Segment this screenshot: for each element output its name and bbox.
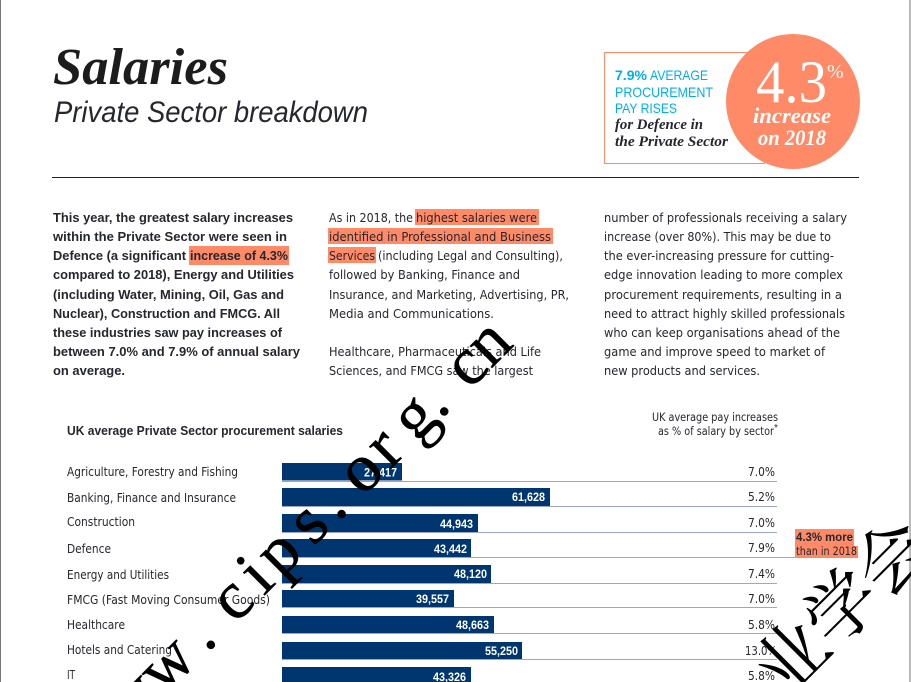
callout text: PAY RISES <box>615 100 677 116</box>
text column 3: number of professionals receiving a salary <box>604 210 847 225</box>
callout text: 7.9% <box>615 67 648 83</box>
row: Defence: Defence <box>67 542 111 556</box>
text column 2: highest salaries were <box>416 210 537 225</box>
text column 2: Healthcare, Pharmaceuticals and Life <box>329 344 541 359</box>
text column 1: Nuclear), Construction and FMCG. All <box>53 306 280 321</box>
row: Banking: Banking, Finance and Insurance <box>67 491 236 505</box>
text column 2: Services <box>329 248 375 263</box>
row: Defence <box>67 539 795 558</box>
row: Agriculture: 27,417 <box>364 466 397 480</box>
text column 3: increase (over 80%). This may be due to <box>604 229 831 244</box>
circle: 4.3% increase: on 2018 <box>758 125 826 150</box>
text column 3 <box>604 210 847 378</box>
text column 3: new products and services. <box>604 363 760 378</box>
row: Banking: 61,628 <box>512 490 545 504</box>
row: Energy: Energy and Utilities <box>67 568 169 582</box>
circle: 4.3% increase <box>726 34 860 169</box>
row: Hotels: 55,250 <box>485 644 518 658</box>
text column 2: As in 2018, the <box>329 210 413 225</box>
text column 3: the ever-increasing pressure for cutting- <box>604 248 834 263</box>
row: IT <box>67 667 775 682</box>
row: Energy: 48,120 <box>454 567 487 581</box>
pay increase column heading: * <box>774 423 778 434</box>
callout text: AVERAGE <box>650 67 708 83</box>
callout: 4.3% more than in 2018: than in 2018 <box>796 545 857 558</box>
row: Construction: Construction <box>67 515 135 529</box>
row: Hotels: 13.0% <box>745 644 777 658</box>
bar chart heading: UK average Private Sector procurement salaries <box>67 423 343 438</box>
row: Agriculture: Agriculture, Forestry and Fishing <box>67 465 238 479</box>
text column 1 <box>52 210 301 378</box>
row: Agriculture: 7.0% <box>748 465 775 479</box>
pay increase column heading: as % of salary by sector <box>658 425 774 438</box>
row: Healthcare: 48,663 <box>456 618 489 632</box>
text column 1: increase of 4.3% <box>190 248 288 263</box>
text column 2: Insurance, and Marketing, Advertising, PR, <box>329 287 569 302</box>
text column 2: Sciences, and FMCG saw the largest <box>329 363 533 378</box>
callout text: the Private Sector <box>615 134 728 150</box>
title <box>53 39 368 129</box>
text column 1: (including Water, Mining, Oil, Gas and <box>53 287 284 302</box>
text column 1: between 7.0% and 7.9% of annual salary <box>53 344 301 359</box>
pay increase column heading <box>652 411 778 438</box>
callout text: for Defence in <box>615 117 703 133</box>
row: FMCG: FMCG (Fast Moving Consumer Goods) <box>67 593 270 607</box>
row: Defence: 7.9% <box>748 541 775 555</box>
row: Construction <box>67 514 777 533</box>
callout: 4.3% more than in 2018 <box>795 529 858 558</box>
row: Agriculture <box>67 463 777 482</box>
callout text: PROCUREMENT <box>615 84 713 100</box>
row: FMCG <box>67 590 777 608</box>
text column 1: This year, the greatest salary increases <box>53 210 293 225</box>
pay increase column heading: UK average pay increases <box>652 411 778 424</box>
row: IT: IT <box>67 668 75 682</box>
row: Hotels <box>67 642 777 660</box>
text column 1: these industries saw pay increases of <box>53 325 283 340</box>
text column 3: who can keep organisations ahead of the <box>604 325 840 340</box>
text column 2: followed by Banking, Finance and <box>329 267 520 282</box>
row: Banking: 5.2% <box>748 490 775 504</box>
row: Banking <box>67 488 777 507</box>
text column 2: (including Legal and Consulting), <box>378 248 563 263</box>
row: Healthcare: Healthcare <box>67 618 125 632</box>
row: Defence: 43,442 <box>434 542 467 556</box>
subtitle: Private Sector breakdown <box>54 96 368 129</box>
text column 1: within the Private Sector were seen in <box>52 229 287 244</box>
row: FMCG: 7.0% <box>748 592 775 606</box>
text column 3: edge innovation leading to more complex <box>604 267 843 282</box>
text column 1: on average. <box>53 363 125 378</box>
row: Healthcare: 5.8% <box>748 618 775 632</box>
text column 1: Defence (a significant <box>53 248 187 263</box>
callout text <box>615 67 728 150</box>
text column 3: procurement requirements, resulting in a <box>604 287 842 302</box>
circle: 4.3% increase: % <box>827 61 844 83</box>
bar chart <box>67 463 795 682</box>
circle: 4.3% increase: increase <box>753 103 831 128</box>
row: Energy: 7.4% <box>748 567 775 581</box>
text column 1: compared to 2018), Energy and Utilities <box>53 267 294 282</box>
row: Construction: 7.0% <box>748 516 775 530</box>
callout: 4.3% more than in 2018: 4.3% more <box>796 532 853 544</box>
row: Hotels: Hotels and Catering <box>67 643 172 657</box>
circle: 4.3% increase: 4.3 <box>756 49 827 115</box>
title: Salaries <box>53 39 228 96</box>
text column 2: Media and Communications. <box>329 306 494 321</box>
text column 3: need to attract highly skilled professionals <box>604 306 845 321</box>
callout: defence pay rise <box>604 34 860 169</box>
text column 2: identified in Professional and Business <box>329 229 551 244</box>
row: FMCG: 39,557 <box>416 592 449 606</box>
text column 2 <box>328 209 569 378</box>
row: Construction: 44,943 <box>440 517 473 531</box>
row: Healthcare <box>67 616 777 634</box>
row: Energy <box>67 565 777 584</box>
text column 3: game and improve speed to market of <box>604 344 826 359</box>
